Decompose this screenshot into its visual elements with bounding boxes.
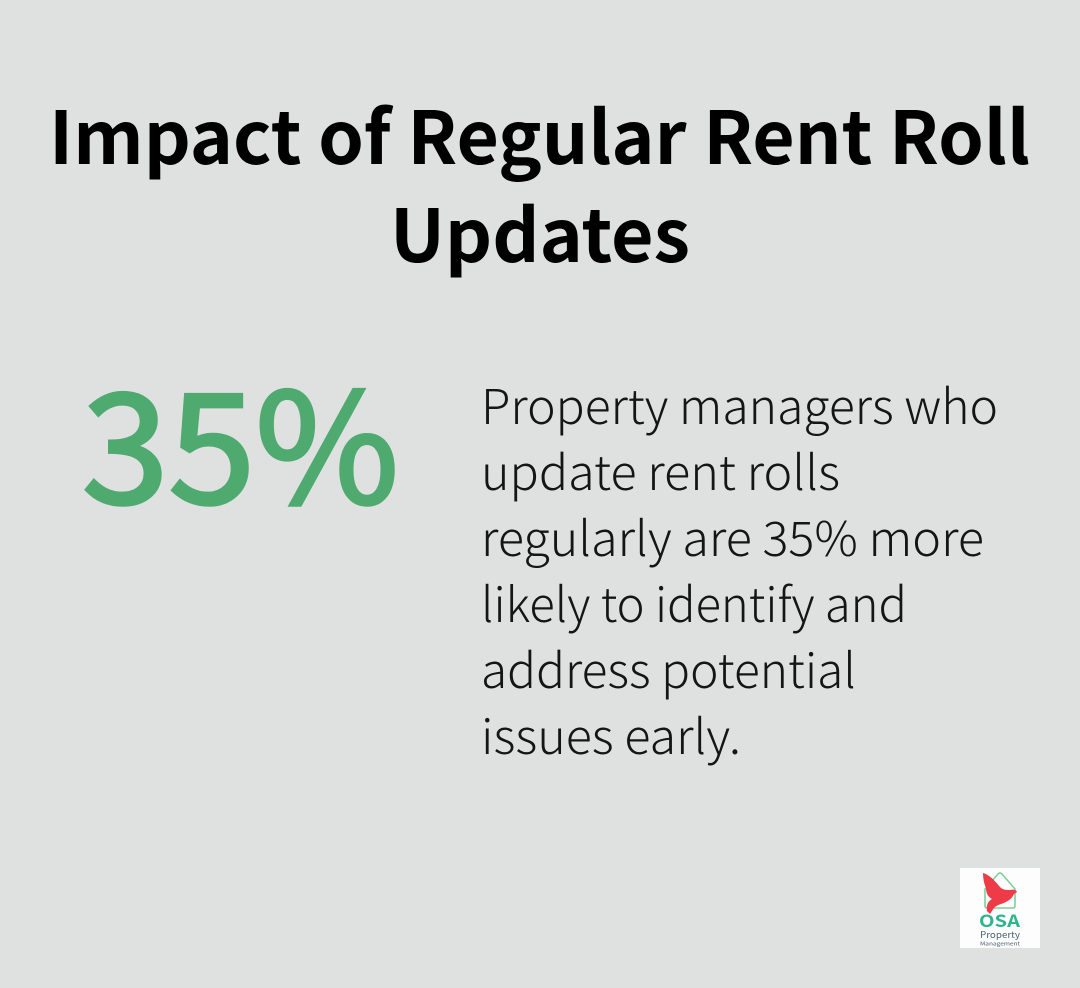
icon: house outline — [985, 873, 1015, 908]
big stat: 35%: 35% — [82, 327, 399, 547]
icon: red bird — [983, 873, 1017, 914]
logo wordmark: OSA — [979, 907, 1020, 932]
logo: Property — [980, 928, 1020, 941]
description text: address potential — [481, 632, 856, 702]
logo: Management — [980, 940, 1020, 948]
description text: update rent rolls — [481, 434, 840, 504]
title: Updates — [390, 178, 690, 284]
logo — [960, 868, 1040, 948]
description text: issues early. — [481, 698, 741, 768]
description text: regularly are 35% more — [481, 500, 984, 570]
title: Impact of Regular Rent Roll — [49, 80, 1030, 186]
description text: Property managers who — [481, 368, 998, 438]
description text — [481, 368, 998, 768]
description text: likely to identify and — [481, 566, 907, 636]
title — [49, 80, 1030, 284]
